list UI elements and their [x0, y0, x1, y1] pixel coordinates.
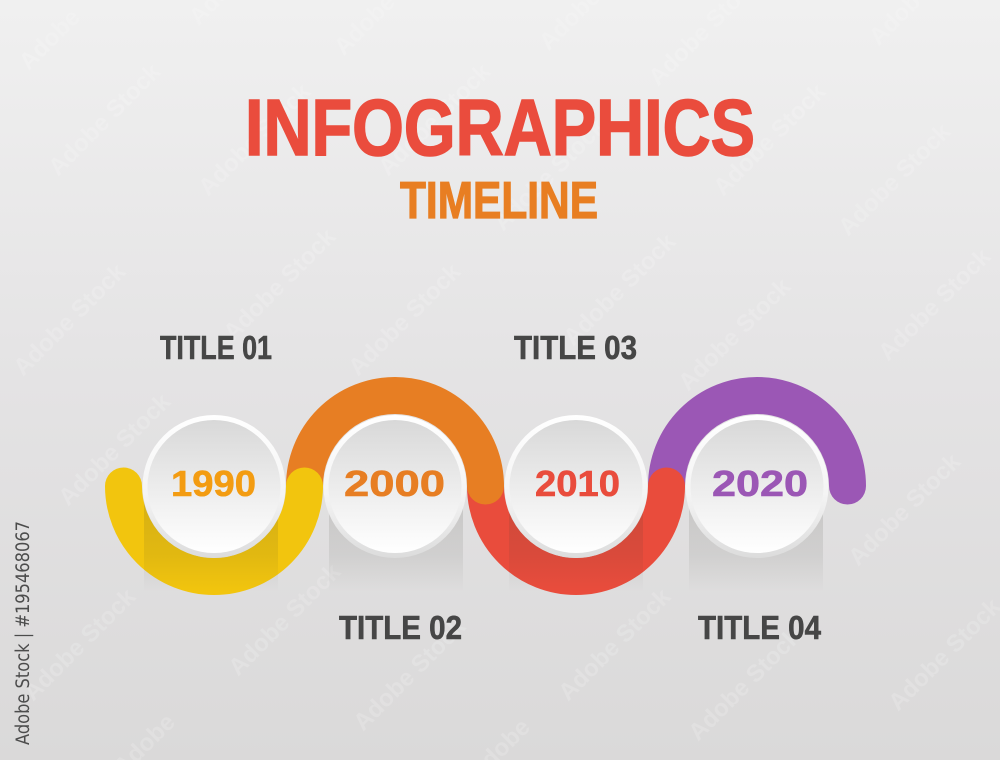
year: 2010: 2010 [535, 463, 620, 504]
arc: orange 2000 [304, 396, 486, 486]
main title: INFOGRAPHICS [245, 83, 755, 172]
watermark pattern: Adobe Stock [218, 223, 342, 346]
watermark pattern: Adobe Stock [488, 113, 612, 236]
label: title 03: TITLE 03 [514, 329, 637, 366]
watermark pattern: Adobe Stock [223, 558, 347, 681]
watermark pattern: Adobe Stock [708, 78, 832, 201]
shadow: circle 1 [144, 500, 278, 592]
node: 2010 [504, 415, 648, 558]
label: title 02: TITLE 02 [339, 609, 462, 646]
year: 1990: 1990 [171, 463, 256, 504]
watermark pattern: Adobe Stock [373, 58, 497, 181]
watermark pattern: Adobe Stock [683, 623, 807, 746]
watermark pattern: Adobe Stock [558, 228, 682, 351]
arc: yellow 1990 [124, 486, 304, 576]
watermark pattern: Adobe [14, 4, 86, 76]
shadow: circle 3 [509, 500, 643, 592]
shadow: circle 2 [329, 500, 463, 592]
watermark pattern: Adobe Stock [348, 613, 472, 736]
node: 1990 [142, 415, 286, 558]
watermark pattern: Adobe Stock [8, 258, 132, 381]
watermark pattern: Adobe Stock [673, 273, 797, 396]
year: 2020: 2020 [712, 463, 808, 504]
watermark pattern: Adobe Stock [18, 583, 142, 706]
stock id: Adobe Stock | #195468067 [13, 521, 34, 745]
node: 2020 [686, 415, 828, 558]
watermark pattern: Adobe Stock [843, 448, 967, 571]
label: title 01: TITLE 01 [160, 329, 272, 366]
watermark pattern: Adobe Stock [53, 388, 177, 511]
arc: purple 2020 [666, 396, 848, 486]
year: 2000: 2000 [344, 463, 445, 504]
arc: red 2010 [486, 486, 666, 576]
watermark pattern: Adobe Stock [553, 583, 677, 706]
label: title 04: TITLE 04 [698, 609, 822, 646]
watermark pattern: Adobe Stock [873, 243, 997, 366]
watermark pattern: Adobe Stock [43, 58, 167, 181]
watermark pattern: Adobe Stock [193, 78, 317, 201]
shadow: circle 4 [689, 500, 823, 592]
subtitle: TIMELINE [400, 172, 598, 230]
watermark pattern: Adobe Stock [343, 258, 467, 381]
watermark pattern: Adobe Stock [833, 118, 957, 241]
node: 2000 [324, 415, 466, 558]
